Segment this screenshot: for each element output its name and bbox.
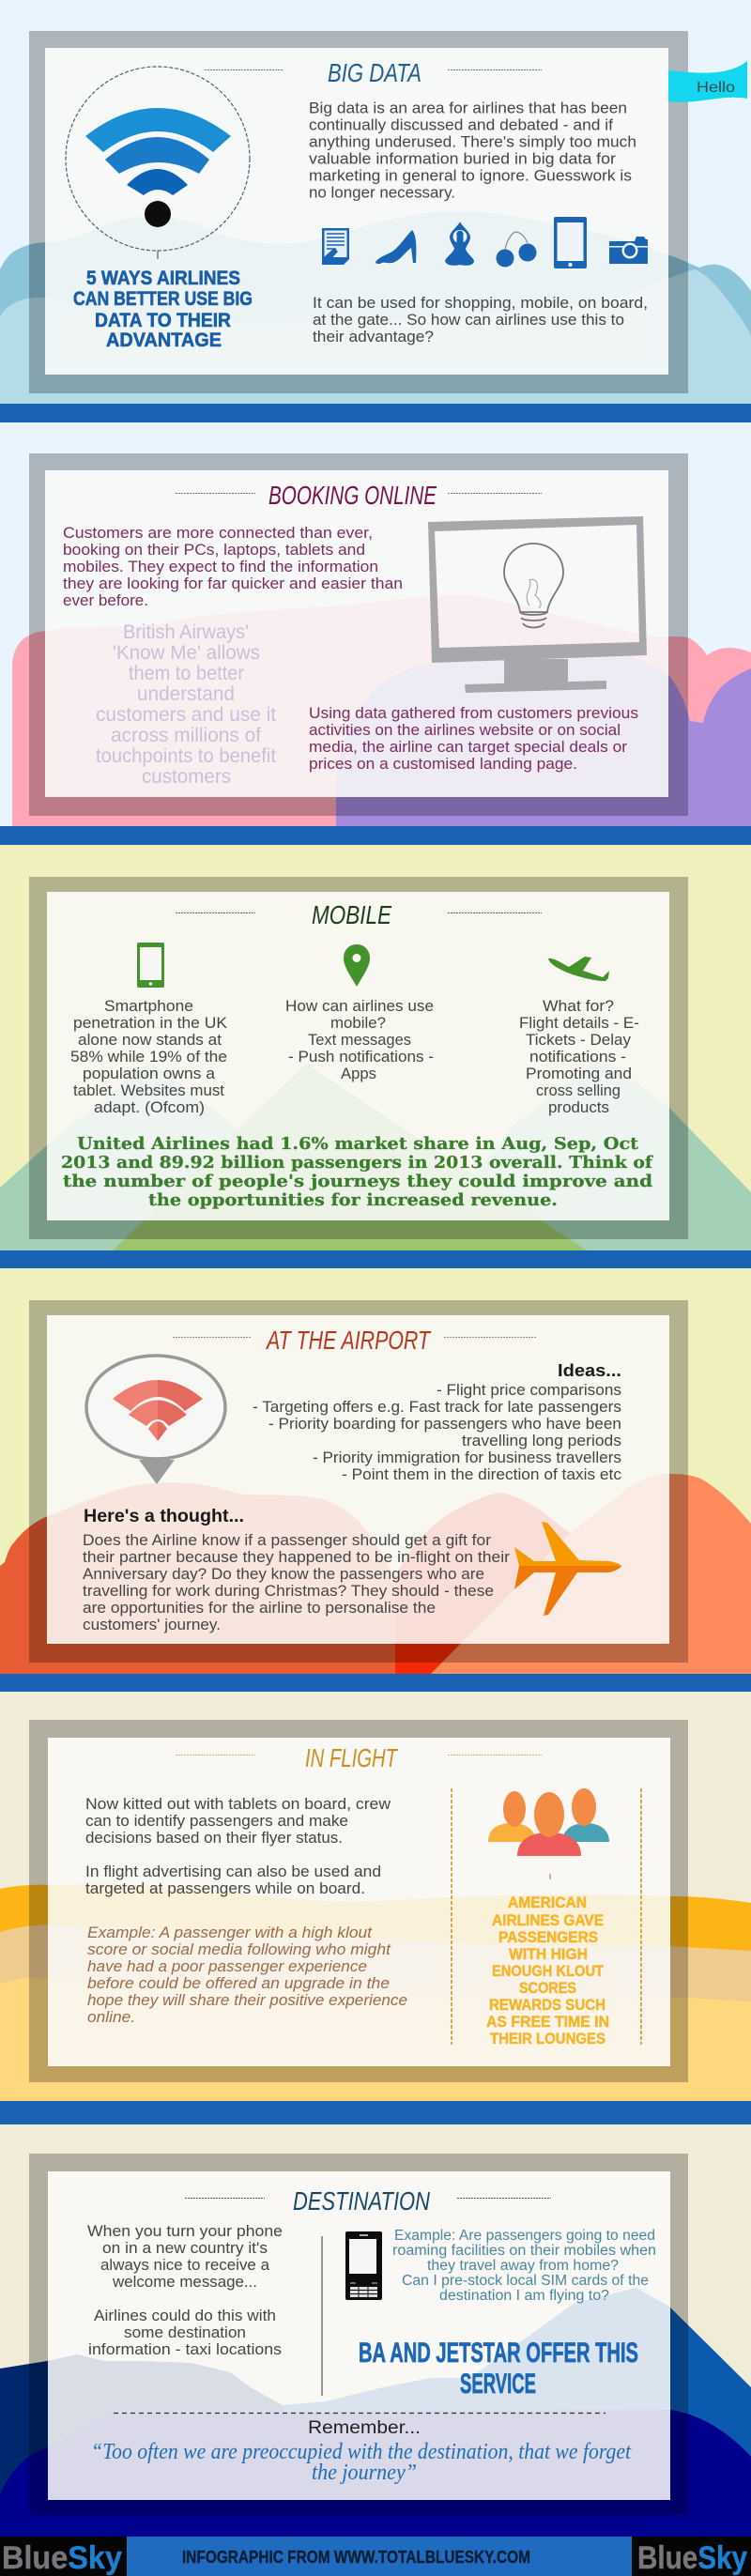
callout: american airlines: REWARDS SUCH [489, 1996, 605, 2014]
text: here's a thought: are opportunities for the airline to personalise the [83, 1600, 436, 1617]
frame [29, 877, 688, 1239]
text: how can airlines use mobile: mobile? [330, 1015, 386, 1032]
text: how can airlines use this: their advantage? [313, 329, 434, 345]
text: customers connected: booking on their PCs, laptops, tablets and [63, 542, 365, 559]
text: customers connected [63, 525, 403, 609]
text: what for: products [548, 1099, 609, 1116]
callout: british airways: customers and use it [96, 704, 276, 726]
text: smartphone penetration: adapt. (Ofcom) [94, 1099, 205, 1116]
text: example: online. [87, 2009, 135, 2026]
text: welcome message: Airlines could do this with [94, 2308, 276, 2324]
text: what for: notifications - [529, 1049, 626, 1066]
callout: british airways: them to better [129, 663, 244, 684]
callout: united airlines [61, 1134, 653, 1210]
text: welcome message: When you turn your phone [87, 2223, 283, 2240]
section: in flight [0, 1720, 751, 2124]
text: smartphone penetration: penetration in the UK [73, 1015, 227, 1032]
text: ideas: - Priority boarding for passengers who have been [268, 1416, 621, 1433]
quote: the journey” [312, 2461, 417, 2485]
text: here's a thought: Anniversary day? Do they know the passengers who are [83, 1566, 484, 1583]
text: example: score or social media following who might [87, 1941, 392, 1958]
text: big data intro: anything underused. There's simply too much [309, 133, 636, 150]
text: using data: prices on a customised landing page. [309, 756, 577, 773]
divider bar [0, 404, 751, 422]
panel [47, 892, 669, 1220]
text: how can airlines use mobile: - Push notifications - [288, 1049, 434, 1066]
icon: people [488, 1788, 609, 1856]
text: example [87, 1924, 407, 2026]
callout: american airlines: THEIR LOUNGES [490, 2030, 605, 2047]
text: welcome message: on in a new country it's [102, 2240, 268, 2257]
panel [45, 48, 668, 375]
callout: american airlines: PASSENGERS [498, 1928, 598, 1946]
divider bar [0, 826, 751, 845]
text: big data intro: valuable information buried in big data for [309, 150, 617, 167]
frame [29, 2154, 688, 2515]
text: welcome message: always nice to receive a [100, 2257, 270, 2274]
panel [48, 2171, 670, 2500]
divider bar [0, 1250, 751, 1268]
text: what for: What for? [543, 998, 614, 1015]
text: roaming example: destination I am flying to? [439, 2288, 609, 2304]
background shapes: orange [0, 1474, 751, 1674]
icon: smartphone [554, 217, 587, 268]
text: what for: Promoting and [526, 1066, 632, 1082]
text: how can airlines use mobile [285, 998, 434, 1082]
callout: american airlines [486, 1894, 609, 2047]
text: here's a thought: customers' journey. [83, 1617, 221, 1633]
text: here's a thought: their partner because they happened to be in-flight on their [83, 1549, 511, 1566]
title: ADVANTAGE [106, 330, 222, 351]
heading: booking online: BOOKING ONLINE [268, 481, 437, 510]
icon: notepad [322, 228, 349, 265]
text: kitted out with tablets: targeted at passengers while on board. [85, 1880, 365, 1897]
section: destination [0, 2154, 751, 2537]
section: big data [0, 31, 751, 422]
text: smartphone penetration: 58% while 19% of the [70, 1049, 227, 1066]
heading: in flight: IN FLIGHT [305, 1743, 398, 1772]
divider bar [0, 1674, 751, 1692]
text: example: have had a poor passenger experience [87, 1958, 367, 1975]
text: ideas: - Priority immigration for business travellers [313, 1449, 621, 1466]
text: ideas: - Flight price comparisons [437, 1382, 621, 1399]
icon: wifi pin [86, 1356, 225, 1484]
panel [47, 1315, 669, 1644]
text: welcome message: welcome message... [112, 2274, 257, 2291]
text: kitted out with tablets: Now kitted out with tablets on board, crew [85, 1796, 391, 1813]
text: using data [309, 705, 638, 773]
callout: ba and jetstar [359, 2338, 638, 2400]
text: example: Example: A passenger with a high klout [87, 1924, 373, 1941]
text: welcome message [87, 2223, 283, 2358]
text: using data: Using data gathered from customers previous [309, 705, 638, 722]
footer source text: INFOGRAPHIC FROM WWW.TOTALBLUESKY.COM [182, 2548, 530, 2567]
text: ideas: travelling long periods [462, 1433, 621, 1449]
callout: british airways: customers [142, 766, 231, 788]
text: roaming example: Can I pre-stock local SIM cards of the [402, 2273, 649, 2289]
text: welcome message: information - taxi locations [88, 2341, 282, 2358]
icon: plane green [548, 957, 609, 981]
callout: british airways: touchpoints to benefit [96, 745, 276, 767]
callout: american airlines: ENOUGH KLOUT [492, 1962, 605, 1980]
text: how can airlines use mobile: Apps [341, 1066, 376, 1082]
text: customers connected: they are looking for far quicker and easier than [63, 575, 403, 592]
text: smartphone penetration: alone now stands at [78, 1032, 222, 1049]
text: smartphone penetration: Smartphone [104, 998, 193, 1015]
text: big data intro: continually discussed and debated - and if [309, 116, 613, 133]
heading: destination: DESTINATION [293, 2186, 431, 2216]
panel [48, 1738, 670, 2066]
background waves: yellow [0, 1884, 751, 2103]
heading: mobile: MOBILE [312, 900, 391, 929]
quote [91, 2440, 632, 2485]
icon: high heel shoe [376, 230, 416, 264]
background clouds: pink and purple [12, 595, 751, 826]
text: what for: cross selling [536, 1082, 621, 1099]
section: mobile [0, 877, 751, 1268]
text: what for: Flight details - E- [519, 1015, 639, 1032]
callout: american airlines: WITH HIGH [509, 1945, 588, 1963]
section: at the airport [0, 1300, 751, 1692]
text: smartphone penetration: population owns a [83, 1066, 216, 1082]
callout: british airways: across millions of [111, 725, 261, 746]
callout: united airlines: 2013 and 89.92 billion passengers in 2013 overall. Think of [61, 1153, 653, 1173]
icon: camera [609, 237, 648, 264]
icon: wifi in dashed circle [66, 67, 250, 259]
text: customers connected: ever before. [63, 592, 148, 609]
text: here's a thought [83, 1507, 511, 1633]
text: here's a thought: Here's a thought... [84, 1507, 244, 1526]
frame [29, 453, 688, 816]
icon: mobile phone black [345, 2231, 382, 2300]
background clouds: blue [0, 211, 751, 406]
text: smartphone penetration: tablet. Websites must [73, 1082, 224, 1099]
icon: monitor with bulb [428, 516, 647, 693]
background mountains: navy and blue [0, 2288, 751, 2537]
text: here's a thought: travelling for work during Christmas? They should - these [83, 1583, 494, 1600]
callout: american airlines: SCORES [519, 1979, 576, 1997]
text: example: before could be offered an upgrade in the [87, 1975, 390, 1992]
text: here's a thought: Does the Airline know if a passenger should get a gift for [83, 1532, 492, 1549]
text: how can airlines use mobile: Text messages [308, 1032, 411, 1049]
callout: british airways: 'Know Me' allows [113, 642, 260, 664]
text: roaming example: Example: Are passengers going to need [394, 2228, 655, 2244]
text: how can airlines use mobile: How can airlines use [285, 998, 434, 1015]
title: 5 WAYS AIRLINES [86, 268, 240, 289]
text: kitted out with tablets: can to identify passengers and make [85, 1813, 348, 1830]
text: kitted out with tablets: decisions based on their flyer status. [85, 1830, 343, 1847]
title [73, 268, 253, 351]
text: ideas: - Point them in the direction of taxis etc [342, 1466, 621, 1483]
icon: yoga figure [445, 222, 474, 266]
text: welcome message: some destination [124, 2324, 246, 2341]
title: DATA TO THEIR [95, 310, 231, 331]
text: customers connected: Customers are more connected than ever, [63, 525, 373, 542]
callout: united airlines: the opportunities for increased revenue. [148, 1190, 558, 1210]
title: CAN BETTER USE BIG [73, 288, 253, 310]
text: big data intro: marketing in general to ignore. Guesswork is [309, 167, 632, 184]
text: using data: media, the airline can target special deals or [309, 739, 628, 756]
flag: hello: Hello [697, 80, 735, 96]
text: ideas: Ideas... [558, 1361, 621, 1380]
footer logo left: BlueSky [2, 2540, 122, 2576]
background mountains: green [0, 1056, 751, 1250]
frame [29, 31, 688, 393]
text: ideas: - Targeting offers e.g. Fast track for late passengers [253, 1399, 621, 1416]
text: kitted out with tablets: In flight advertising can also be used and [85, 1863, 381, 1880]
callout: ba and jetstar: SERVICE [460, 2369, 536, 2400]
flag: hello [668, 61, 747, 102]
text: big data intro [309, 100, 636, 201]
text: how can airlines use this: It can be used for shopping, mobile, on board, [313, 295, 648, 312]
text: big data intro: Big data is an area for airlines that has been [309, 100, 627, 116]
text: roaming example: they travel away from home? [427, 2258, 619, 2274]
callout: united airlines: the number of people's journeys they could improve and [63, 1172, 652, 1191]
heading: big data: BIG DATA [328, 58, 421, 87]
icon: plane orange [514, 1522, 621, 1616]
icon: cherries [496, 232, 537, 267]
text: kitted out with tablets [85, 1796, 391, 1897]
callout: british airways: British Airways' [123, 621, 249, 643]
text: using data: activities on the airlines website or on social [309, 722, 621, 739]
quote: “Too often we are preoccupied with the destination, that we forget [91, 2440, 632, 2464]
text: roaming example: roaming facilities on their mobiles when [392, 2243, 656, 2259]
callout: american airlines: AS FREE TIME IN [486, 2013, 609, 2031]
section: booking online [0, 453, 751, 845]
divider bar [0, 2101, 751, 2124]
callout: united airlines: United Airlines had 1.6% market share in Aug, Sep, Oct [77, 1134, 639, 1154]
icon: phone green [137, 943, 164, 988]
frame [29, 1300, 688, 1663]
text: example: hope they will share their positive experience [87, 1992, 407, 2009]
footer [0, 2537, 751, 2576]
callout: american airlines: AMERICAN [508, 1894, 587, 1911]
text: how can airlines use this: at the gate... So how can airlines use this to [313, 312, 624, 329]
text: what for: Tickets - Delay [526, 1032, 632, 1049]
text: customers connected: mobiles. They expect to find the information [63, 559, 378, 575]
text: how can airlines use this [313, 295, 648, 345]
text: ideas [253, 1361, 621, 1483]
text: remember: Remember... [308, 2418, 421, 2438]
callout: american airlines: AIRLINES GAVE [492, 1911, 604, 1929]
callout: british airways: understand [137, 683, 235, 705]
text: what for [519, 998, 639, 1116]
icons row [322, 217, 648, 268]
heading: at the airport: AT THE AIRPORT [265, 1326, 431, 1355]
icon: map pin [344, 944, 370, 987]
panel [45, 470, 668, 797]
text: big data intro: no longer necessary. [309, 184, 455, 201]
text: roaming example [392, 2228, 656, 2304]
frame [29, 1720, 688, 2082]
callout: british airways [96, 621, 276, 788]
text: smartphone penetration [70, 998, 227, 1116]
